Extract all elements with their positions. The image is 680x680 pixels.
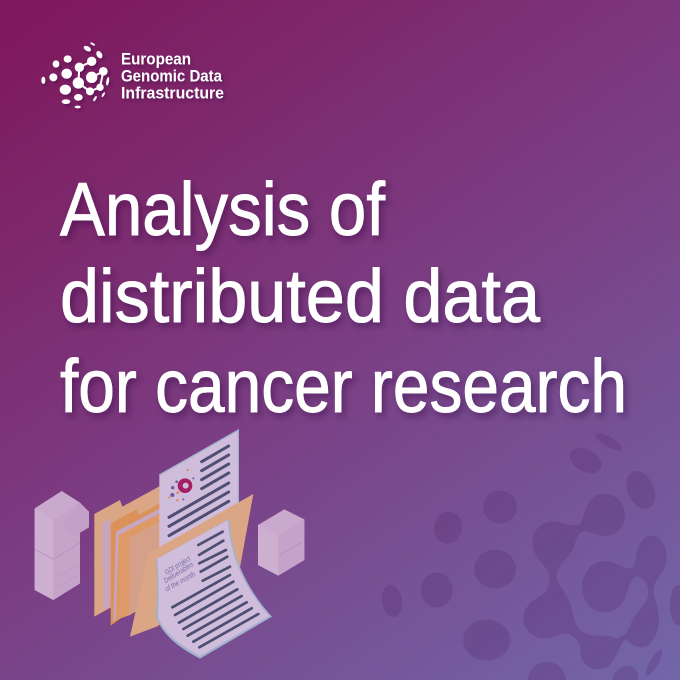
folder pink panel	[129, 522, 160, 615]
front page heading: of the month	[163, 569, 197, 593]
logo wordmark	[121, 50, 224, 102]
logo wordmark: Infrastructure	[121, 84, 224, 102]
document: curled front page	[156, 519, 272, 659]
front page heading	[162, 553, 197, 593]
logo wordmark: European	[121, 50, 191, 68]
front page text lines	[172, 532, 258, 647]
orange folder grey edge	[113, 508, 160, 621]
title: distributed data	[60, 254, 540, 338]
logo wordmark: Genomic Data	[121, 66, 222, 86]
icon: back folder	[94, 486, 160, 617]
icon: filing cabinet right	[258, 509, 304, 576]
title	[60, 167, 627, 428]
icon: stacked filing cabinet left	[35, 491, 89, 600]
front page heading: GDI project	[163, 553, 193, 577]
folder inner panel	[116, 513, 160, 620]
logo mark	[41, 42, 110, 108]
illustration: filing cabinets, folders and documents	[35, 430, 304, 659]
back page text lines	[169, 446, 229, 536]
title: Analysis of	[60, 167, 385, 251]
document: back page with logo	[159, 430, 238, 563]
logo: European Genomic Data Infrastructure	[41, 42, 224, 108]
front page heading: Deliverables	[162, 560, 195, 585]
back folder inner sheet	[102, 519, 111, 611]
decorative logo watermark	[380, 430, 680, 680]
back page logo	[168, 469, 194, 501]
icon: front folder	[130, 494, 253, 637]
icon: orange folder	[111, 503, 160, 626]
